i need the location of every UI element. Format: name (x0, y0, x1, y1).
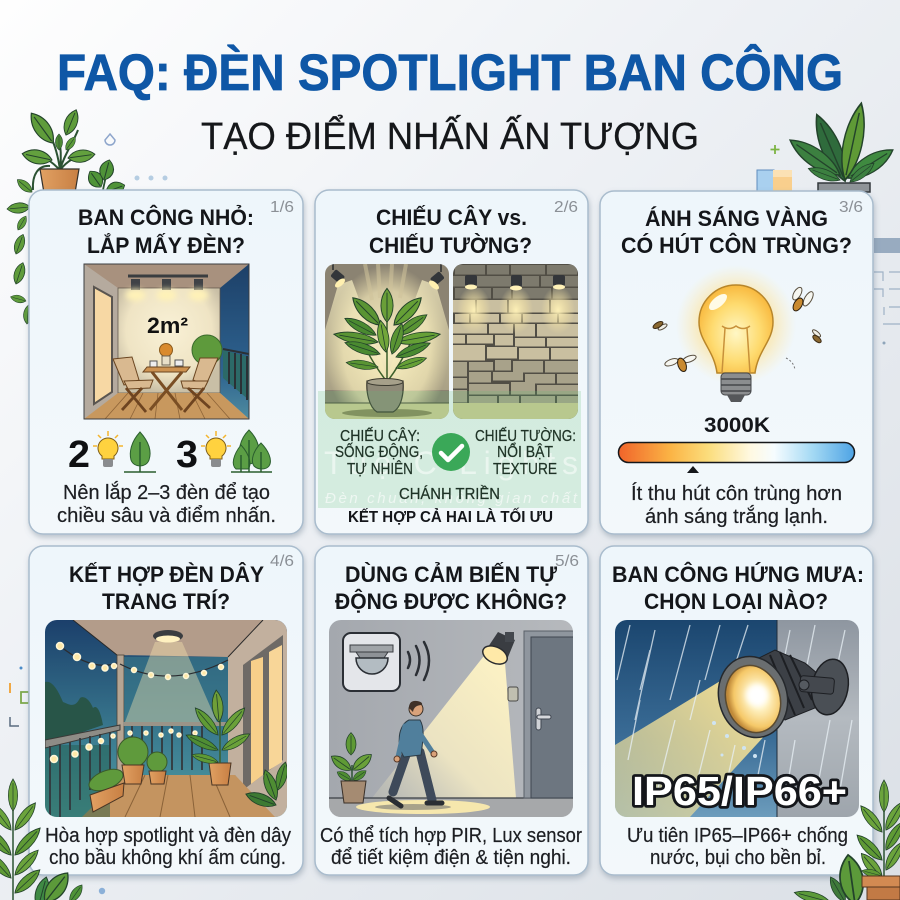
illustration: waterproof spotlight (615, 620, 859, 817)
panel: 3/6 warm light and insects (600, 191, 873, 534)
heading: CHỌN LOẠI NÀO? (644, 589, 828, 614)
description: Nên lắp 2–3 đèn để tạo (63, 481, 270, 504)
heading (335, 562, 567, 614)
decor: left side marks (10, 666, 105, 894)
number 3 with bulb and trees: 3 (176, 434, 198, 476)
heading: LẮP MẤY ĐÈN? (87, 233, 245, 258)
heading: TRANG TRÍ? (102, 589, 230, 614)
card background (315, 190, 588, 534)
panel: 1/6 small balcony (29, 190, 303, 534)
number 2 with bulb and tree (68, 431, 156, 476)
watermark band: Tuệ C Lights (324, 445, 578, 481)
description (631, 482, 842, 528)
decor: books (757, 145, 792, 192)
panel: 4/6 string lights (29, 546, 303, 875)
description: Hòa hợp spotlight và đèn dây (45, 825, 291, 847)
description: chiều sâu và điểm nhấn. (57, 505, 276, 527)
subtitle: TẠO ĐIỂM NHẤN ẤN TƯỢNG (201, 113, 699, 158)
label: plant (335, 426, 423, 478)
illustration: balcony: 2m² (147, 313, 188, 338)
plant: top right with pot (785, 101, 897, 192)
heading (78, 205, 254, 258)
icon: insects (652, 284, 825, 377)
watermark band: Đèn chuẩn, không gian chất (325, 490, 578, 507)
page number: 4/6 (270, 553, 294, 570)
heading (612, 562, 864, 614)
label: wall: NỔI BẬT (497, 442, 553, 461)
description: nước, bụi cho bền bỉ. (650, 847, 826, 869)
page number: 1/6 (270, 199, 294, 216)
decor: right side bar and lines (874, 238, 900, 344)
plant: bottom left foreground (0, 779, 85, 900)
description (57, 481, 276, 527)
colour temperature scale (618, 442, 854, 473)
heading: KẾT HỢP ĐÈN DÂY (69, 562, 264, 587)
icon: light bulb (676, 265, 796, 402)
heading: ÁNH SÁNG VÀNG (645, 206, 828, 231)
plant: small leaves beside pot (84, 158, 127, 198)
heading: BAN CÔNG NHỎ: (78, 205, 254, 230)
label: plant: CHIẾU CÂY: (340, 426, 420, 445)
description: cho bầu không khí ấm cúng. (49, 847, 286, 869)
label: plant: SỐNG ĐỘNG, (335, 441, 423, 461)
label: wall: CHIẾU TƯỜNG: (475, 426, 576, 445)
illustration: balcony (84, 264, 249, 419)
panel: 5/6 motion sensor (315, 546, 588, 875)
number 3 with bulb and trees (176, 430, 272, 476)
illustration: plant lit by spotlights (325, 264, 449, 435)
watermark band (318, 391, 581, 508)
description: Ưu tiên IP65–IP66+ chống (627, 825, 848, 847)
heading: BAN CÔNG HỨNG MƯA: (612, 562, 864, 587)
panel: 2/6 plant vs wall (315, 190, 588, 534)
decorative dots (105, 134, 168, 180)
heading (621, 206, 852, 258)
plant: left hanging leaves (7, 202, 33, 324)
card background (29, 546, 303, 875)
page number: 5/6 (555, 553, 579, 570)
illustration: balcony at night (45, 620, 290, 817)
card background (315, 546, 588, 875)
description: Có thể tích hợp PIR, Lux sensor (320, 825, 582, 847)
description (320, 825, 582, 869)
icon: check (432, 433, 470, 471)
heading: CHIẾU TƯỜNG? (369, 233, 532, 258)
plant: top left in pot (15, 108, 96, 195)
caption: CHÁNH TRIỀN (399, 484, 500, 503)
heading: CHIẾU CÂY vs. (376, 205, 527, 230)
caption (348, 484, 553, 526)
description: Ít thu hút côn trùng hơn (631, 482, 842, 505)
title: FAQ: ĐÈN SPOTLIGHT BAN CÔNG (57, 43, 843, 101)
description: ánh sáng trắng lạnh. (645, 505, 828, 528)
plant: bottom right with pot (793, 780, 900, 900)
number 2 with bulb and tree: 2 (68, 434, 90, 476)
label: wall: TEXTURE (493, 461, 557, 478)
value label: 3000K (704, 414, 770, 437)
heading: ĐỘNG ĐƯỢC KHÔNG? (335, 589, 567, 614)
heading (369, 205, 532, 258)
heading: CÓ HÚT CÔN TRÙNG? (621, 233, 852, 258)
card background (29, 190, 303, 534)
card background (600, 546, 873, 875)
description (45, 825, 291, 869)
description: để tiết kiệm điện & tiện nghi. (331, 847, 571, 869)
panel: 6/6 rain-exposed balcony (600, 546, 873, 875)
label: wall (475, 426, 576, 478)
card background (600, 191, 873, 534)
page number: 2/6 (554, 199, 578, 216)
illustration: sensor and walking person (328, 620, 579, 817)
heading (69, 562, 264, 614)
caption: KẾT HỢP CẢ HAI LÀ TỐI ƯU (348, 506, 553, 526)
label: plant: TỰ NHIÊN (347, 459, 413, 478)
description (627, 825, 848, 869)
heading: DÙNG CẢM BIẾN TỰ (345, 562, 558, 587)
illustration: stone wall lit (453, 264, 578, 419)
page number: 3/6 (839, 199, 863, 216)
rating text: IP65/IP66+ (632, 768, 847, 814)
